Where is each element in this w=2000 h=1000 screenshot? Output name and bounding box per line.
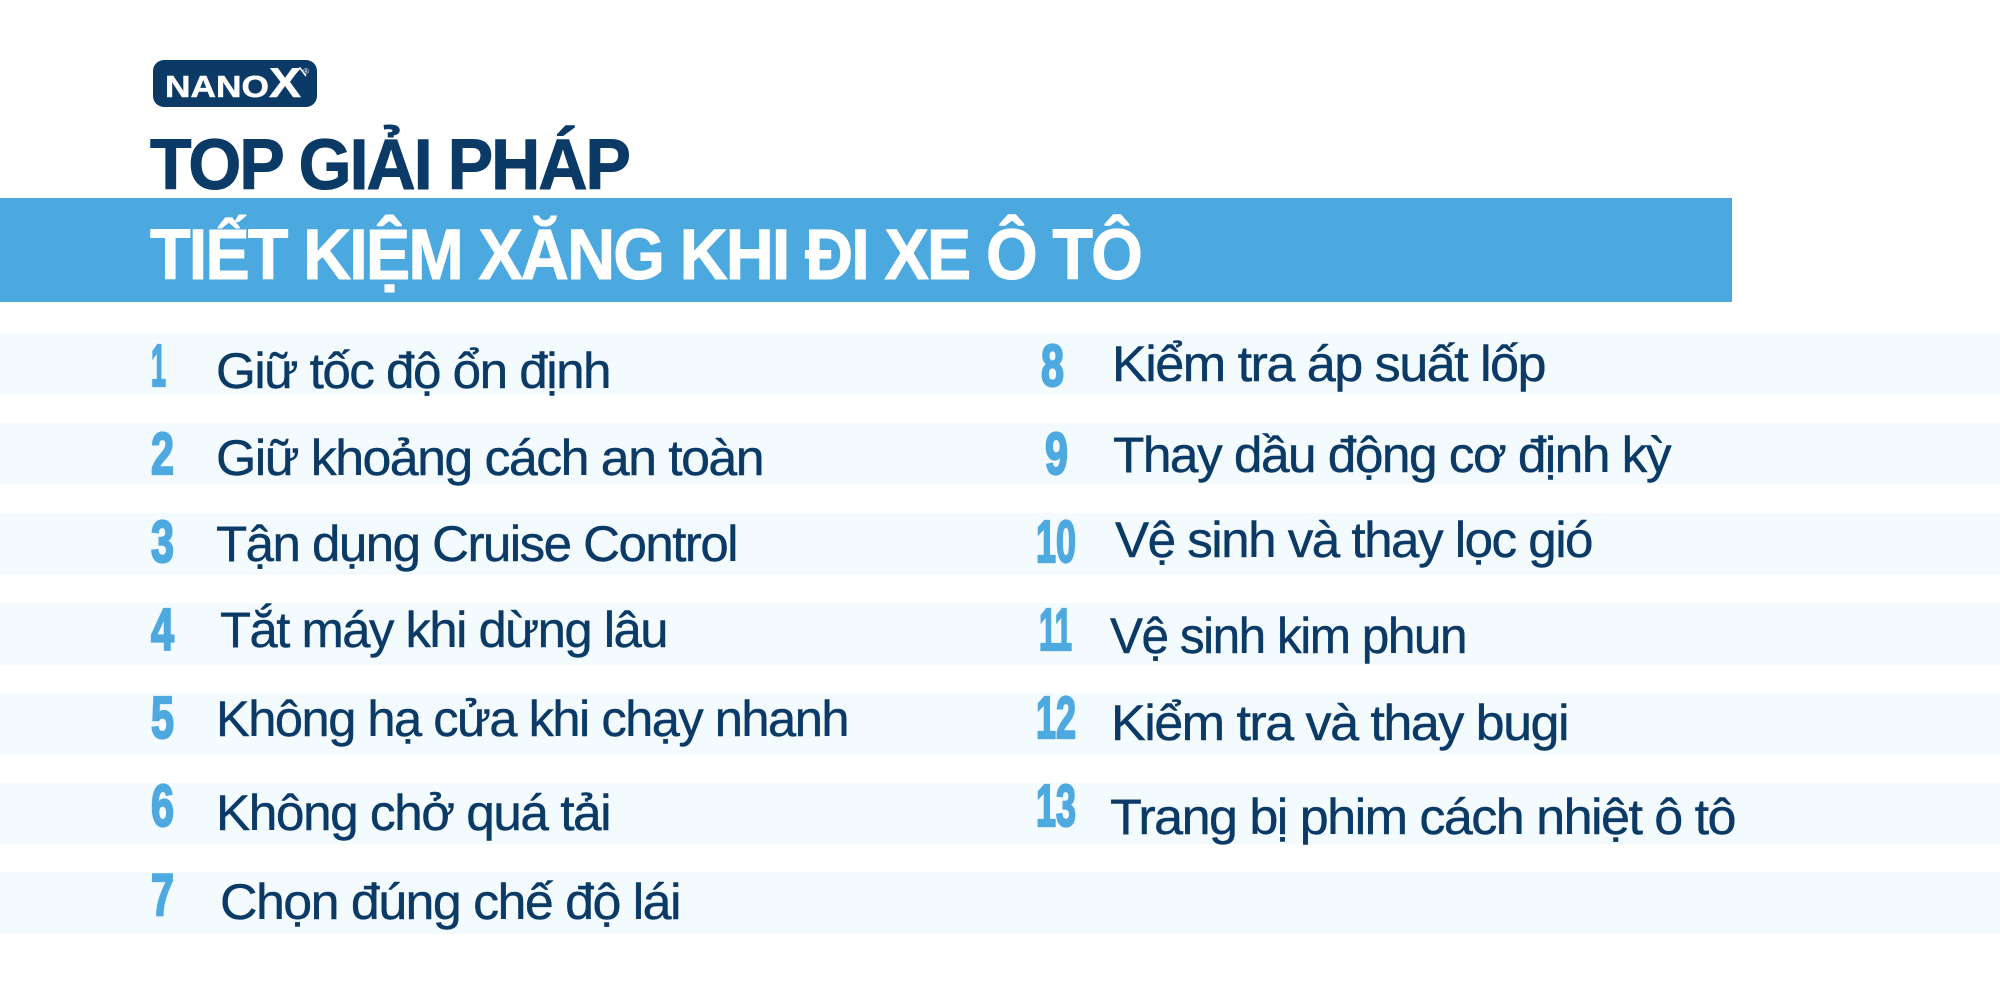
logo: NanoX badge: NANO — [165, 69, 269, 104]
item 11 — [1039, 597, 1466, 664]
heading: line one: TOP GIẢI PHÁP — [150, 126, 629, 205]
item 1: Giữ tốc độ ổn định — [216, 343, 610, 399]
item 3: Tận dụng Cruise Control — [216, 516, 737, 572]
item 2: Giữ khoảng cách an toàn — [216, 430, 763, 486]
item 9: 9 — [1045, 421, 1068, 487]
banner: blue heading band: TIẾT KIỆM XĂNG KHI ĐI XE Ô TÔ — [150, 215, 1141, 295]
item 8 — [1041, 333, 1545, 399]
item 11: Vệ sinh kim phun — [1110, 608, 1466, 664]
item 6 — [151, 773, 610, 841]
item 13: Trang bị phim cách nhiệt ô tô — [1110, 789, 1735, 845]
item 10: 10 — [1036, 509, 1076, 575]
item 12: Kiểm tra và thay bugi — [1111, 695, 1568, 751]
logo: NanoX badge — [153, 59, 317, 107]
item 7: Chọn đúng chế độ lái — [220, 874, 680, 930]
item 6: 6 — [151, 773, 174, 839]
item 7 — [151, 862, 680, 930]
item 12 — [1036, 685, 1568, 751]
panel: right column list — [1036, 333, 1735, 845]
item 4: Tắt máy khi dừng lâu — [220, 602, 667, 658]
item 1: 1 — [151, 333, 166, 399]
item 11: 11 — [1039, 597, 1072, 663]
item 8: Kiểm tra áp suất lốp — [1112, 336, 1545, 392]
item 12: 12 — [1036, 685, 1076, 751]
item 6: Không chở quá tải — [216, 785, 610, 841]
item 3: 3 — [151, 509, 174, 575]
item 4: 4 — [151, 597, 174, 663]
item 10: Vệ sinh và thay lọc gió — [1115, 512, 1592, 568]
item 8: 8 — [1041, 333, 1064, 399]
panel: background row bands — [0, 333, 2000, 934]
panel: left column list — [151, 333, 848, 930]
logo: NanoX badge: X — [269, 59, 301, 106]
banner: blue heading band — [0, 198, 1732, 302]
item 9: Thay dầu động cơ định kỳ — [1113, 427, 1672, 483]
item 13 — [1036, 773, 1735, 845]
item 7: 7 — [151, 862, 174, 928]
item 5: 5 — [151, 685, 174, 751]
item 5: Không hạ cửa khi chạy nhanh — [216, 691, 848, 747]
item 2: 2 — [151, 421, 174, 487]
logo: NanoX badge: ® — [303, 67, 309, 76]
item 13: 13 — [1036, 773, 1076, 839]
